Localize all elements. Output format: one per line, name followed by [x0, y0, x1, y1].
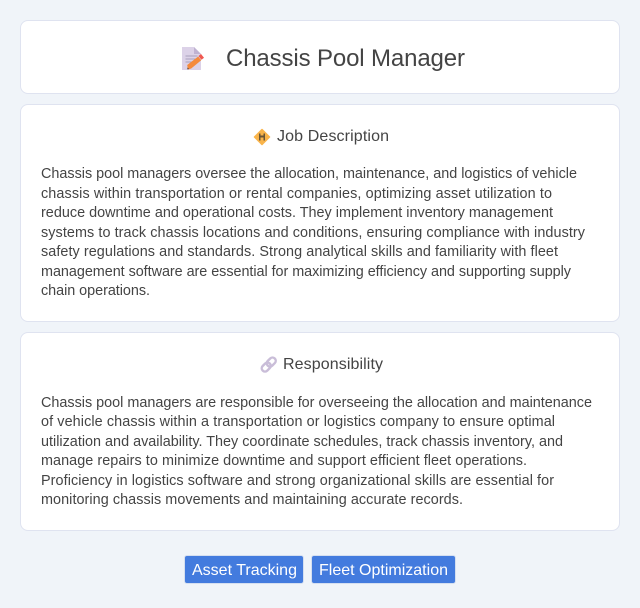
icon: chain link — [260, 356, 277, 373]
icon: document with pencil — [182, 47, 204, 70]
text block: job description: reduce downtime and operational costs. They implement inventory management — [41, 205, 553, 221]
text block: responsibility: Chassis pool managers are responsible for overseeing the allocation and maintenance — [41, 395, 592, 411]
text block: responsibility: manage repairs to minimize downtime and support efficient fleet operations. — [41, 453, 527, 469]
text block: job description: management software are essential for maximizing efficiency and supporting supply — [41, 264, 572, 280]
text block: responsibility: monitoring chassis movements and maintaining accurate records. — [41, 492, 463, 508]
button label: Fleet Optimization: Fleet Optimization — [319, 562, 448, 579]
text block: responsibility: of vehicle chassis within a transportation or logistics company to ensure optimal — [41, 414, 555, 430]
button: Asset Tracking — [184, 555, 304, 584]
text block: job description: safety regulations and standards. Strong analytical skills and familiarity with fleet — [41, 244, 558, 260]
text block: job description: chassis within transportation or rental companies, optimizing asset utilization to — [41, 186, 552, 202]
text block: responsibility — [41, 395, 592, 508]
panel: responsibility card — [20, 332, 620, 531]
text block: job description — [41, 166, 586, 299]
text block: job description: chain operations. — [41, 283, 150, 299]
icon: construction diamond — [254, 130, 270, 144]
text block: job description: systems to track chassis locations and conditions, ensuring compliance with industry — [41, 225, 586, 241]
text block: job description: Chassis pool managers oversee the allocation, maintenance, and logistics of vehicle — [41, 166, 577, 182]
title: Chassis Pool Manager — [226, 45, 465, 72]
button label: Asset Tracking: Asset Tracking — [192, 562, 297, 579]
heading: responsibility: Responsibility — [283, 356, 383, 373]
text block: responsibility: utilization and availability. They coordinate schedules, track chassis inventory, and — [41, 434, 563, 450]
heading: job description: Job Description — [277, 128, 389, 145]
panel: job description card — [20, 104, 620, 322]
text block: responsibility: Proficiency in logistics software and strong organizational skills are essential for — [41, 473, 554, 489]
panel: title card — [20, 20, 620, 94]
button: Fleet Optimization — [311, 555, 456, 584]
